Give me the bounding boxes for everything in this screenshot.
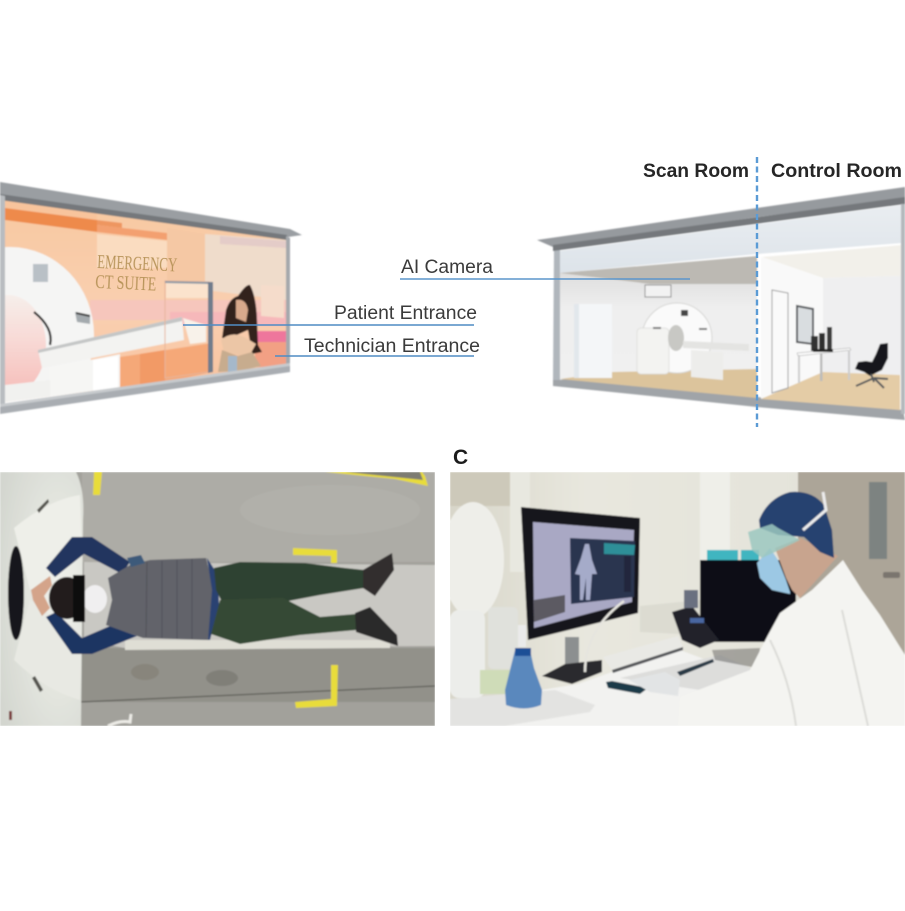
hands [31,576,52,616]
panel label: C: C [453,446,468,469]
surgical mask [757,548,790,594]
panel: technician at control console photo [442,472,905,726]
phone [127,555,145,567]
label: Patient Entrance: Patient Entrance [334,303,477,324]
leader line: Patient Entrance [183,324,474,326]
control room floor [761,372,900,410]
telephone [672,590,719,648]
surgical cap [759,492,834,558]
dashed divider between rooms [756,157,758,427]
mural: technician door [260,296,284,318]
control room back wall [823,276,902,375]
leader line: Technician Entrance [275,355,474,357]
observation window [797,306,813,344]
scan room back wall [559,273,757,380]
desk with monitors [797,327,851,383]
window ledge [640,596,800,634]
CT scanner [637,303,749,380]
arms [46,537,130,577]
computer monitor [521,507,640,640]
trousers [214,562,364,602]
figure: emergency CT suite [0,157,905,726]
mural: CT gantry [4,246,95,382]
control panel device [626,638,681,664]
face mask [83,585,107,613]
upper fascia [559,205,902,273]
label: AI Camera: AI Camera [401,257,493,278]
blue spray bottle [505,625,542,708]
monitor stand [565,637,579,667]
air conditioner [645,285,671,297]
vest [106,558,214,640]
roof [537,187,905,247]
head [48,576,74,620]
hand [629,672,680,696]
label: Scan Room: Scan Room [643,161,749,182]
patient [31,537,398,654]
label: Control Room: Control Room [771,161,902,182]
panel: cutaway view of scan and control rooms [537,187,905,420]
office chair [855,343,888,376]
scan room ceiling [559,256,757,284]
right wall edge [901,204,905,414]
technician coat [678,560,905,726]
concrete floor [76,472,435,649]
teal boxes [707,550,738,560]
mural: patient table [38,317,184,368]
floor and base strip [553,378,905,420]
door [772,290,788,393]
mural title [95,251,178,296]
control room ceiling [762,245,902,278]
stack of documents [450,690,595,726]
door and door frame [798,472,905,654]
mobile phone [606,681,648,694]
exterior wall mural [4,200,287,402]
cable at scanner base [108,714,131,726]
yellow floor tape [93,472,428,708]
CT gantry [0,472,83,726]
panel: patient on CT table photo [0,472,435,726]
desk surface [508,650,702,726]
control room left wall [761,257,823,399]
flexible microphone [585,601,624,672]
technician neck and face [775,538,838,598]
anonymising bar [73,575,85,622]
mural: entrance door [165,281,209,378]
plastic jugs [488,607,518,669]
boots [363,553,394,596]
scanner table [84,562,435,648]
face shield [748,524,800,558]
scan room floor [560,369,757,398]
roof and frame [0,182,302,237]
leader line: AI Camera [400,278,690,280]
desk papers and ruler [622,658,748,690]
jeans waist [207,558,219,640]
panel: exterior view of CT suite [0,182,302,423]
cap strap [803,492,826,530]
black cabinet [700,560,796,642]
equipment cabinet [574,304,612,378]
mural title: CT SUITE [95,271,157,296]
mural: woman and child [222,285,262,354]
mural title: EMERGENCY [97,251,178,276]
scan room gantry through window [450,502,504,614]
control room wall and window [450,472,798,700]
label: Technician Entrance: Technician Entrance [304,336,480,357]
